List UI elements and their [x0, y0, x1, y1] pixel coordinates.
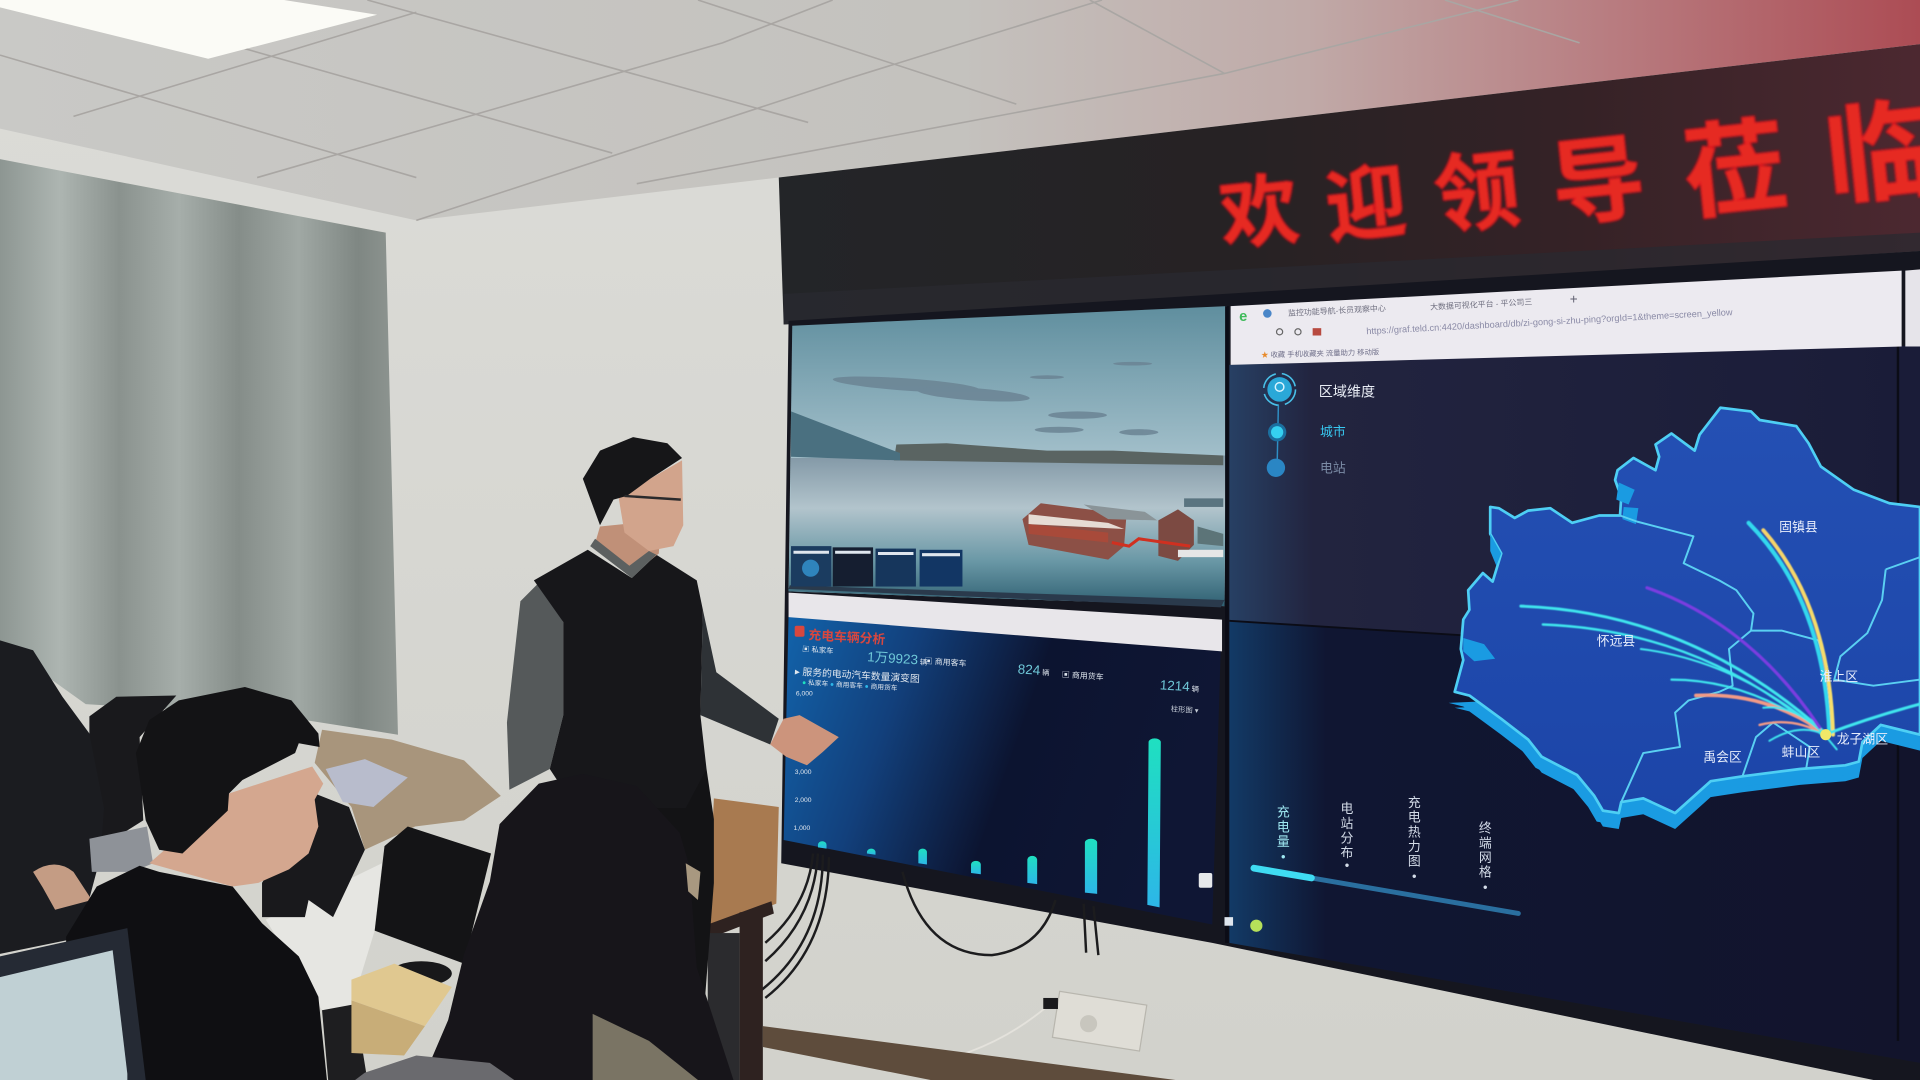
- black bag: [262, 793, 365, 917]
- ceiling light panel: [0, 0, 377, 59]
- monitor stand: [391, 961, 452, 986]
- tab labels: •: [1412, 868, 1417, 883]
- browser window: ★ 收藏 手机收藏夹 流量助力 移动版: [1261, 347, 1380, 360]
- tab labels: 电: [1408, 810, 1421, 825]
- tab labels: 量: [1277, 834, 1290, 849]
- presenter glasses: [624, 496, 681, 500]
- presenter hair: [583, 437, 682, 525]
- far hills on horizon: [894, 443, 1223, 465]
- video wall bezel: [781, 251, 1920, 1080]
- axis labels: 3,000: [795, 769, 812, 776]
- map surface: [1455, 408, 1920, 813]
- dark gap under desk: [322, 1004, 367, 1080]
- district labels: 禹会区: [1703, 750, 1742, 765]
- taskbar icons: [1224, 917, 1262, 932]
- hub point: [1820, 729, 1831, 740]
- bottom tab selector: [1254, 795, 1518, 913]
- panel: charging vehicle analysis dashboard: [784, 593, 1222, 924]
- dashboard title: 充电车辆分析: [808, 627, 886, 647]
- panel: regional map screen: [1224, 269, 1920, 1063]
- tab labels: •: [1281, 849, 1286, 864]
- tab labels: 电: [1341, 801, 1354, 816]
- browser window: 监控功能导航-长员观察中心: [1288, 303, 1386, 318]
- side navigation: [1264, 373, 1375, 477]
- district borders: [1620, 516, 1920, 802]
- stat: commercial vehicles: 824 辆: [1017, 661, 1050, 678]
- icon: region locator: [1264, 373, 1296, 405]
- clouds: [832, 362, 1158, 435]
- axis labels: [793, 691, 813, 832]
- chart subtitle: ▸ 服务的电动汽车数量演变图: [795, 665, 920, 685]
- nav item: station: 电站: [1320, 461, 1346, 476]
- LED welcome sign: [779, 44, 1920, 324]
- lakeside pavilion: [1022, 498, 1223, 561]
- nav heading: 区域维度: [1319, 384, 1375, 400]
- man's face: [149, 767, 323, 887]
- tab labels: [1277, 795, 1492, 894]
- tab labels: 布: [1341, 845, 1354, 860]
- LED welcome sign: 迎: [1321, 157, 1411, 255]
- presenter face: [618, 460, 683, 551]
- presenter vest: [534, 550, 707, 808]
- person's hand: [33, 864, 92, 910]
- panel: lake photo: [789, 306, 1227, 607]
- presenter: [507, 437, 839, 1029]
- flow lines to hub: [1521, 523, 1920, 749]
- tab labels: •: [1345, 857, 1349, 872]
- tab labels: 充: [1408, 795, 1421, 810]
- cardboard box and side table: [708, 798, 779, 1080]
- foreground man: [66, 687, 327, 1080]
- stat: commercial buses: ▣ 商用货车: [1062, 669, 1104, 682]
- LED welcome sign: 莅: [1678, 108, 1793, 233]
- district labels: 怀远县: [1597, 633, 1635, 648]
- left mountain: [791, 411, 900, 460]
- laptop: [0, 928, 146, 1080]
- nav item: city: 城市: [1320, 424, 1346, 439]
- axis labels: 6,000: [796, 691, 813, 698]
- stat: commercial buses: [1062, 669, 1200, 695]
- tab labels: •: [1483, 879, 1488, 894]
- tab labels: 热: [1408, 824, 1421, 839]
- axis labels: 1,000: [793, 825, 811, 832]
- cables under screen: [759, 853, 1098, 1065]
- bar chart: [818, 738, 1161, 907]
- jacket pile on the desk: [315, 730, 501, 850]
- thumbnail strip: [789, 546, 1224, 607]
- lakes: [1463, 482, 1638, 661]
- foreground woman with long hair: [355, 774, 733, 1080]
- seated person at far left: [0, 640, 176, 954]
- man's hair: [136, 687, 320, 853]
- district labels: 蚌山区: [1782, 745, 1820, 760]
- tab labels: 电: [1277, 819, 1290, 834]
- map extrusion: [1449, 697, 1920, 829]
- stat: commercial vehicles: ▣ 商用客车: [924, 656, 967, 668]
- presenter neck: [594, 520, 661, 576]
- axis labels: 2,000: [795, 797, 812, 804]
- LED welcome sign: 欢: [1216, 165, 1303, 261]
- dropdown: 柱形图 ▾: [1170, 704, 1199, 715]
- LED welcome sign: 导: [1546, 126, 1650, 239]
- grey hair of another attendee: [355, 1056, 514, 1080]
- district labels: [1597, 519, 1888, 765]
- white desk front: [266, 863, 382, 1010]
- presenter left arm sleeve: [507, 582, 563, 790]
- tab labels: 图: [1408, 854, 1421, 869]
- legend: ● 私家车 ● 商用客车 ● 商用货车: [802, 678, 898, 692]
- skirting: [763, 1026, 1176, 1080]
- LED welcome sign: 领: [1430, 142, 1525, 246]
- presenter right arm sleeve: [700, 610, 779, 744]
- tab labels: 充: [1277, 805, 1290, 820]
- browser bar: [789, 593, 1222, 651]
- monitor on the desk: [375, 827, 491, 986]
- tab labels: 站: [1341, 816, 1354, 831]
- district labels: 淮上区: [1820, 669, 1858, 684]
- wooden crate: [351, 964, 452, 1056]
- stat: commercial buses: 1214 辆: [1159, 677, 1200, 695]
- stat: private cars: ▣ 私家车: [802, 644, 834, 655]
- tab labels: 力: [1408, 839, 1421, 854]
- browser window: [1231, 269, 1920, 365]
- icon: presenter hand: [770, 715, 839, 765]
- browser window: 大数据可视化平台 - 平公司三: [1430, 296, 1533, 312]
- wall outlet: [1043, 991, 1147, 1051]
- corner widget: [1199, 873, 1212, 888]
- presenter collar: [590, 539, 656, 578]
- browser window: e: [1239, 309, 1247, 325]
- tab labels: 分: [1341, 830, 1354, 845]
- tab labels: 格: [1479, 865, 1492, 880]
- district labels: 固镇县: [1779, 519, 1818, 534]
- browser window: https://graf.teld.cn:4420/dashboard/db/zi-gong-si-zhu-ping?orgId=1&theme=screen_yellow: [1366, 307, 1733, 336]
- ceiling with tiles: [0, 0, 1920, 220]
- tab labels: 终: [1479, 821, 1492, 836]
- folded clothes: [89, 827, 153, 872]
- icon: title badge: [795, 626, 804, 637]
- woman's sweater: [593, 1014, 698, 1080]
- choropleth map: [1449, 408, 1920, 829]
- stat: private cars: 1万9923 辆: [867, 649, 928, 668]
- district labels: 龙子湖区: [1837, 731, 1888, 746]
- woman's glasses: [686, 863, 700, 900]
- man's torso: [66, 866, 327, 1080]
- curtain: [0, 159, 398, 735]
- stat: commercial vehicles: [924, 656, 1050, 678]
- browser window: +: [1570, 292, 1578, 307]
- presenter legs: [588, 769, 714, 1029]
- tab labels: 网: [1479, 850, 1492, 865]
- stat: private cars: [802, 644, 928, 668]
- tab labels: 端: [1479, 835, 1492, 850]
